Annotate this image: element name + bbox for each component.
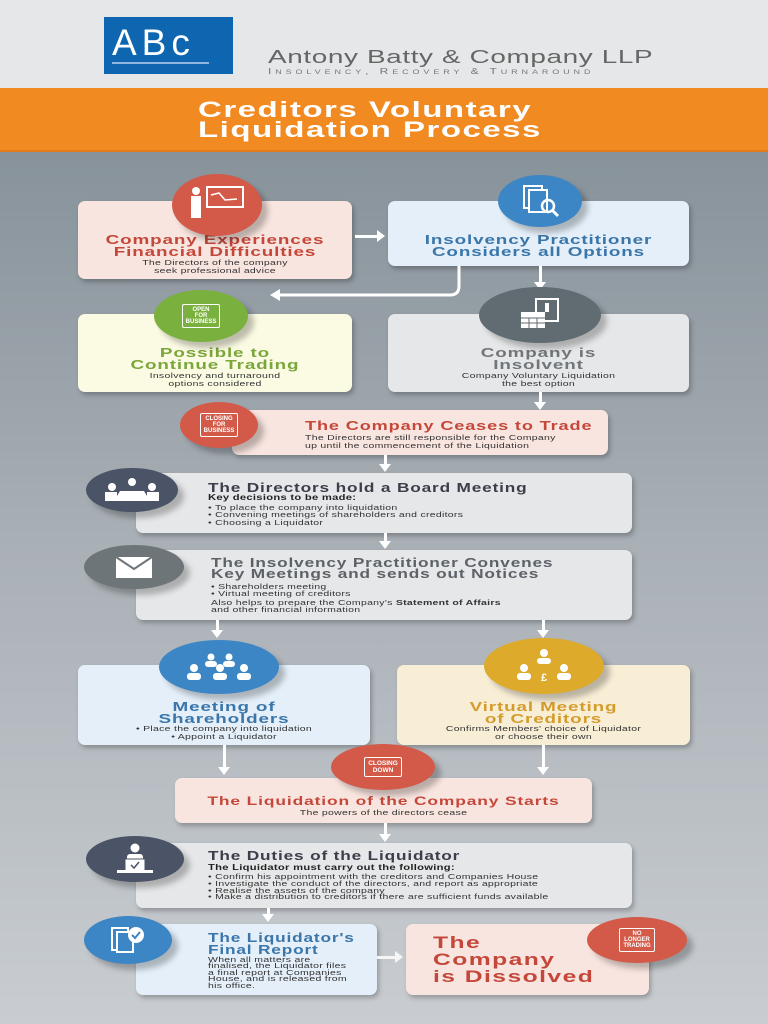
panel: duties of the liquidator: The Liquidator must carry out the following: bbox=[208, 863, 455, 872]
panel: company is insolvent: Insolvent bbox=[493, 357, 584, 372]
panel: company ceases to trade: up until the commencement of the Liquidation bbox=[305, 441, 529, 450]
panel: virtual meeting of creditors: or choose their own bbox=[495, 732, 592, 741]
company name: Antony Batty & Company LLP bbox=[268, 47, 653, 67]
panel: insolvency practitioner considers all options: Insolvency Practitioner bbox=[425, 232, 652, 247]
panel: duties of the liquidator: • Realise the assets of the company bbox=[208, 886, 385, 895]
icon: open for business sign bbox=[154, 290, 248, 342]
panel: company is dissolved bbox=[406, 924, 649, 995]
panel: IP convenes meetings: Also helps to prepare the Company's Statement of Affairs bbox=[211, 598, 501, 607]
panel: duties of the liquidator: • Make a distribution to creditors if there are sufficient funds available bbox=[208, 892, 549, 901]
icon: closing down sign: DOWN bbox=[373, 767, 393, 774]
icon: no longer trading sign bbox=[587, 917, 687, 963]
icon: shareholders group bbox=[159, 640, 279, 694]
panel: IP convenes meetings: • Virtual meeting of creditors bbox=[211, 589, 351, 598]
panel: meeting of shareholders: Meeting of bbox=[173, 699, 275, 714]
panel: virtual meeting of creditors: Confirms Members' choice of Liquidator bbox=[446, 724, 641, 733]
panel: IP convenes meetings: • Shareholders meeting bbox=[211, 582, 326, 591]
arrow bbox=[384, 455, 387, 466]
panel: company is insolvent: the best option bbox=[502, 379, 575, 388]
panel: company ceases to trade bbox=[232, 410, 608, 455]
panel: possible to continue trading: options considered bbox=[168, 379, 262, 388]
panel: final report: finalised, the Liquidator files bbox=[208, 961, 346, 970]
icon: envelope bbox=[84, 545, 184, 589]
icon: open for business sign: BUSINESS bbox=[186, 319, 216, 325]
panel: final report: When all matters are bbox=[208, 955, 310, 964]
panel: company is dissolved: The bbox=[433, 933, 481, 952]
icon: creditors bbox=[484, 638, 604, 694]
panel: meeting of shareholders bbox=[78, 665, 370, 745]
arrow: right bbox=[355, 235, 379, 238]
panel: board meeting bbox=[136, 473, 632, 533]
panel: board meeting: The Directors hold a Board Meeting bbox=[208, 481, 528, 495]
panel: company experiences financial difficulties: The Directors of the company bbox=[142, 258, 288, 267]
arrow: down to ceases bbox=[539, 392, 542, 404]
panel: board meeting: • Convening meetings of shareholders and creditors bbox=[208, 510, 463, 519]
panel: IP convenes meetings bbox=[136, 550, 632, 620]
tagline: Insolvency, Recovery & Turnaround bbox=[268, 67, 594, 76]
panel: insolvency practitioner considers all options: Considers all Options bbox=[432, 244, 645, 259]
arrow: down to insolvent bbox=[539, 266, 542, 284]
panel: company is dissolved: Company bbox=[433, 950, 555, 969]
panel: company is insolvent: Company Voluntary Liquidation bbox=[462, 371, 615, 380]
title: Liquidation Process bbox=[198, 117, 542, 142]
panel: company ceases to trade: The Company Ceases to Trade bbox=[305, 419, 592, 433]
panel: final report: a final report at Companies bbox=[208, 968, 342, 977]
icon: creditors: £ bbox=[541, 672, 547, 684]
icon: open for business sign: FOR bbox=[195, 313, 207, 319]
icon: closing down sign bbox=[331, 744, 435, 790]
panel: IP convenes meetings: Key Meetings and sends out Notices bbox=[211, 567, 539, 581]
panel: final report bbox=[136, 924, 377, 995]
panel: possible to continue trading: Continue Trading bbox=[131, 357, 299, 372]
panel: final report: The Liquidator's bbox=[208, 931, 355, 945]
arrow: curved connector to continue trading bbox=[270, 266, 460, 301]
panel: board meeting: • To place the company into liquidation bbox=[208, 503, 398, 512]
panel: company ceases to trade: The Directors are still responsible for the Company bbox=[305, 433, 556, 442]
panel: board meeting: Key decisions to be made: bbox=[208, 493, 356, 502]
panel: final report: Final Report bbox=[208, 943, 319, 957]
icon: closing for business sign bbox=[180, 402, 258, 448]
panel: company is insolvent bbox=[388, 314, 689, 392]
arrow bbox=[384, 533, 387, 543]
icon: no longer trading sign: TRADING bbox=[623, 943, 651, 949]
panel: duties of the liquidator: • Confirm his appointment with the creditors and Companies House bbox=[208, 872, 538, 881]
panel: liquidation starts: The powers of the directors cease bbox=[300, 808, 467, 817]
arrows: split bbox=[216, 620, 219, 632]
panel: possible to continue trading bbox=[78, 314, 352, 392]
panel: possible to continue trading: Possible to bbox=[160, 345, 270, 360]
panel: company is dissolved: is Dissolved bbox=[433, 967, 594, 986]
icon: presenter bbox=[172, 174, 262, 236]
icon: calculator and warning bbox=[479, 287, 601, 343]
arrows: merge bbox=[223, 745, 226, 769]
logo bbox=[104, 17, 233, 74]
panel: duties of the liquidator: • Investigate the conduct of the directors, and report as appropriate bbox=[208, 879, 538, 888]
icon: no longer trading sign: LONGER bbox=[624, 937, 650, 943]
arrow bbox=[384, 823, 387, 836]
panel: company experiences financial difficulties: seek professional advice bbox=[154, 266, 276, 275]
icon: documents search bbox=[498, 175, 582, 227]
icon: closing for business sign: BUSINESS bbox=[204, 428, 234, 434]
panel: duties of the liquidator: The Duties of the Liquidator bbox=[208, 849, 460, 863]
icon: board meeting bbox=[86, 468, 178, 512]
icon: closing for business sign: CLOSING bbox=[205, 416, 233, 422]
icon: no longer trading sign: NO bbox=[632, 931, 642, 937]
arrow: right to dissolved bbox=[377, 956, 397, 959]
arrow bbox=[267, 908, 270, 916]
title: Creditors Voluntary bbox=[198, 97, 532, 122]
panel: possible to continue trading: Insolvency and turnaround bbox=[150, 371, 280, 380]
panel: company experiences financial difficulties: Company Experiences bbox=[106, 232, 324, 247]
panel: company experiences financial difficulties: Financial Difficulties bbox=[114, 244, 316, 259]
logo: ABc bbox=[112, 22, 195, 63]
icon: closing down sign: CLOSING bbox=[368, 760, 398, 767]
title bbox=[198, 97, 542, 142]
panel: IP convenes meetings: The Insolvency Practitioner Convenes bbox=[211, 556, 553, 570]
panel: virtual meeting of creditors: of Creditors bbox=[485, 711, 602, 726]
icon: liquidator at desk bbox=[86, 836, 184, 882]
panel: board meeting: • Choosing a Liquidator bbox=[208, 518, 323, 527]
panel: company is insolvent: Company is bbox=[481, 345, 596, 360]
panel: final report: his office. bbox=[208, 981, 255, 990]
icon: report with tick bbox=[84, 916, 172, 964]
panel: meeting of shareholders: • Appoint a Liquidator bbox=[171, 732, 277, 741]
panel: final report: House, and is released from bbox=[208, 974, 347, 983]
panel: virtual meeting of creditors bbox=[397, 665, 690, 745]
icon: closing for business sign: FOR bbox=[213, 422, 225, 428]
panel: meeting of shareholders: • Place the company into liquidation bbox=[136, 724, 312, 733]
icon: open for business sign: OPEN bbox=[192, 307, 210, 313]
panel: company experiences financial difficulties bbox=[78, 201, 352, 279]
panel: liquidation starts bbox=[175, 778, 592, 823]
panel: virtual meeting of creditors: Virtual Meeting bbox=[470, 699, 617, 714]
panel: insolvency practitioner considers all options bbox=[388, 201, 689, 266]
header band bbox=[0, 0, 768, 88]
panel: liquidation starts: The Liquidation of the Company Starts bbox=[207, 794, 560, 808]
title band bbox=[0, 88, 768, 152]
panel: IP convenes meetings: and other financial information bbox=[211, 605, 360, 614]
panel: duties of the liquidator bbox=[136, 843, 632, 908]
panel: meeting of shareholders: Shareholders bbox=[159, 711, 289, 726]
